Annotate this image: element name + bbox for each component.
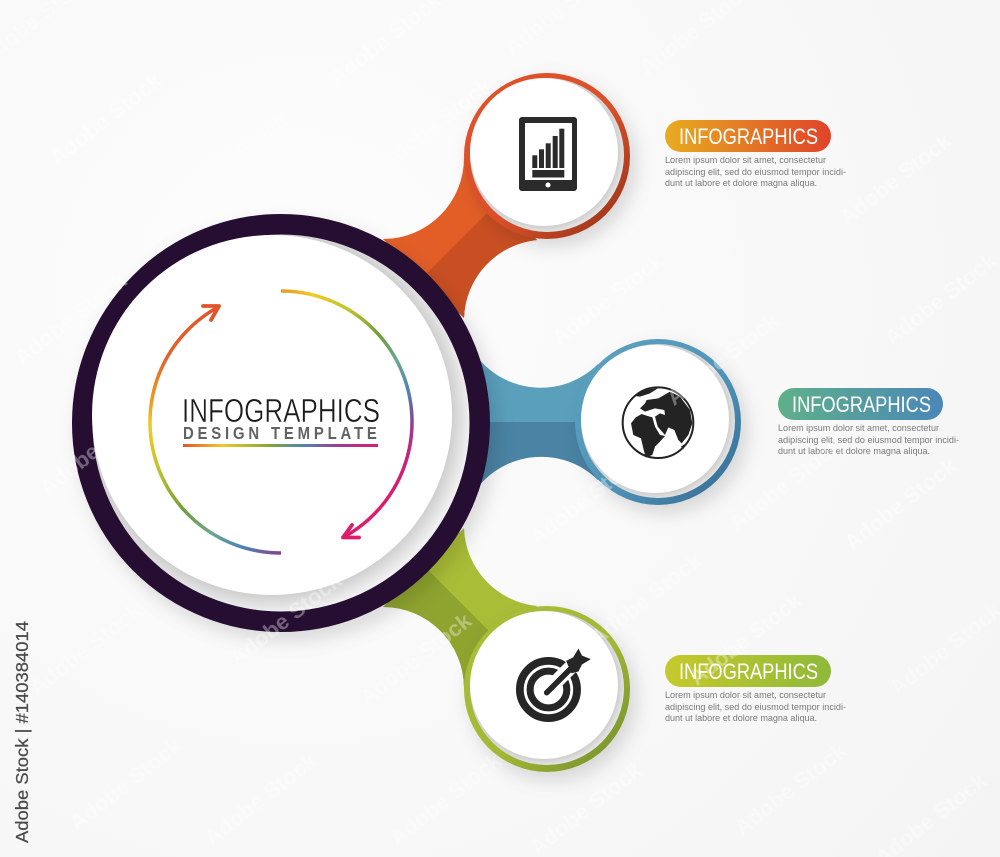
description 2: adipiscing elit, sed do eiusmod tempor incidi- [778, 435, 959, 445]
watermark text: Adobe Stock [385, 747, 507, 850]
icon: globe [623, 387, 693, 458]
circular rainbow arrows [147, 288, 415, 556]
watermark text: Adobe Stock [662, 307, 784, 410]
pill 1 [665, 120, 831, 152]
watermark text: Adobe Stock [725, 432, 847, 535]
connector: blue [478, 358, 620, 487]
arrowhead: magenta [343, 525, 359, 538]
pill 2 heading: INFOGRAPHICS [792, 392, 931, 417]
watermark text: Adobe Stock [685, 587, 807, 690]
watermark text: Adobe Stock [10, 267, 132, 370]
watermark text: Adobe Stock [375, 72, 497, 175]
title text: INFOGRAPHICS [182, 392, 380, 429]
node 1: orange [464, 73, 630, 239]
watermark text: Adobe Stock [355, 607, 477, 710]
description 2 [778, 423, 959, 456]
connector: orange [383, 158, 537, 318]
label 3 [665, 655, 846, 723]
watermark text: Adobe Stock [65, 732, 187, 835]
watermark text: Adobe Stock [35, 397, 157, 500]
watermark text: Adobe Stock [25, 597, 147, 700]
arrowhead: orange [203, 306, 219, 320]
stock id text: Adobe Stock | #140384014 [12, 621, 32, 843]
main circle [82, 224, 480, 622]
icon: target with arrow [520, 649, 591, 718]
watermark text: Adobe Stock [585, 547, 707, 650]
watermark text: Adobe Stock [730, 737, 852, 840]
main disc shade [92, 234, 470, 612]
description 3: adipiscing elit, sed do eiusmod tempor incidi- [665, 702, 846, 712]
icon: tablet with bar chart [519, 117, 577, 191]
description 1: Lorem ipsum dolor sit amet, consectetur [665, 155, 826, 165]
watermark text: Adobe Stock [880, 247, 1000, 350]
description 1 [665, 155, 846, 188]
pill 3 [665, 655, 831, 687]
watermark text: Adobe Stock [225, 567, 347, 670]
connector: green [383, 528, 537, 688]
description 3 [665, 690, 846, 723]
pill 3 heading: INFOGRAPHICS [679, 659, 818, 684]
watermark text: Adobe Stock [840, 452, 962, 555]
pill 1 heading: INFOGRAPHICS [679, 124, 818, 149]
watermark text: Adobe Stock [547, 247, 669, 350]
description 2: dunt ut labore et dolore magna aliqua. [778, 446, 930, 456]
watermark text: Adobe Stock [172, 107, 294, 210]
watermark text: Adobe Stock [45, 67, 167, 170]
watermark text: Adobe Stock [835, 127, 957, 230]
node 3: green [464, 606, 630, 772]
description 3: Lorem ipsum dolor sit amet, consectetur [665, 690, 826, 700]
central title [182, 392, 380, 447]
subtitle text: DESIGN TEMPLATE [183, 424, 377, 443]
description 1: dunt ut labore et dolore magna aliqua. [665, 178, 817, 188]
rainbow underline [183, 444, 378, 447]
description 1: adipiscing elit, sed do eiusmod tempor incidi- [665, 167, 846, 177]
label 2 [778, 388, 959, 456]
main dark ring [82, 224, 480, 622]
watermark text: Adobe Stock [525, 447, 647, 550]
label 1 [665, 120, 846, 188]
node 2: blue [575, 339, 741, 505]
description 3: dunt ut labore et dolore magna aliqua. [665, 713, 817, 723]
description 2: Lorem ipsum dolor sit amet, consectetur [778, 423, 939, 433]
pill 2 [778, 388, 943, 420]
main white disc [92, 235, 452, 595]
watermark text: Adobe Stock [200, 747, 322, 850]
